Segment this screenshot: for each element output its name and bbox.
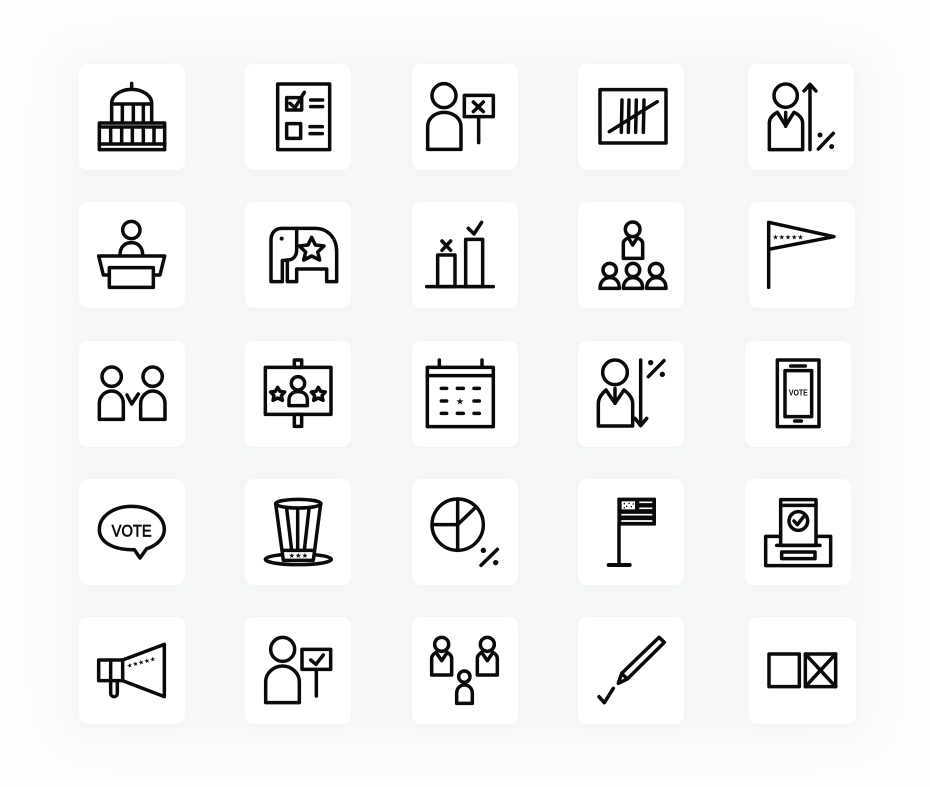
tile: rating down <box>578 341 684 447</box>
icon: person with reject sign <box>428 84 493 149</box>
icon: american flag on stand <box>609 498 656 565</box>
icon: megaphone: ★★★★★ <box>126 655 157 670</box>
tile: elephant <box>245 202 351 308</box>
tile: ballot checklist <box>245 64 351 170</box>
icon: elephant with star <box>271 228 337 282</box>
icon: candidate rating down <box>598 360 665 426</box>
tile: megaphone <box>79 617 185 724</box>
tile: calendar <box>412 341 518 447</box>
tile: poll bars <box>412 202 518 308</box>
tile: leader and group <box>578 202 684 308</box>
icon: campaign billboard <box>265 360 331 426</box>
icon: three people network <box>432 637 497 703</box>
icon: two candidates versus <box>99 367 165 419</box>
icon: person with approve sign <box>266 637 331 703</box>
icon: capitol building <box>99 83 165 150</box>
tile: rating up <box>748 64 854 170</box>
tile: pencil and check <box>578 617 684 724</box>
tile: two candidates <box>79 341 185 447</box>
icon: podium speaker <box>99 221 165 287</box>
tile: person with reject sign <box>412 64 518 170</box>
icon: mobile voting phone: VOTE <box>789 389 808 398</box>
tile: american flag <box>578 479 684 585</box>
icon: poll bar chart <box>427 222 493 287</box>
icon: pie chart percent <box>432 499 498 565</box>
icon: pennant flag: ★★★★★ <box>772 234 804 242</box>
icon: pencil and check <box>599 637 664 703</box>
tile: tally board <box>578 64 684 170</box>
tile: vote speech bubble <box>79 479 185 585</box>
icon: uncle sam hat: ★★★ <box>288 551 309 560</box>
tile: capitol <box>79 64 185 170</box>
tile: podium speaker <box>79 202 185 308</box>
icon: election calendar: ★ <box>456 396 464 407</box>
tile: pennant <box>749 202 855 308</box>
icon: tally board <box>600 90 666 143</box>
tile: pie chart <box>412 479 518 585</box>
tile: three people network <box>412 617 518 724</box>
tile: person with approve sign <box>245 617 351 724</box>
icon: vote speech bubble: VOTE <box>112 521 152 540</box>
icon: empty and crossed checkboxes <box>769 654 836 687</box>
tile: ballot box <box>745 479 851 585</box>
icon: ballot checklist <box>278 84 330 150</box>
tile: uncle sam hat <box>245 479 351 585</box>
tile: checkboxes <box>749 617 856 724</box>
tile: campaign billboard <box>245 341 351 447</box>
tile: mobile voting <box>745 341 851 447</box>
icon: ballot box <box>766 500 831 566</box>
icon: candidate rating up <box>769 84 834 150</box>
icon: leader and group <box>600 222 666 288</box>
